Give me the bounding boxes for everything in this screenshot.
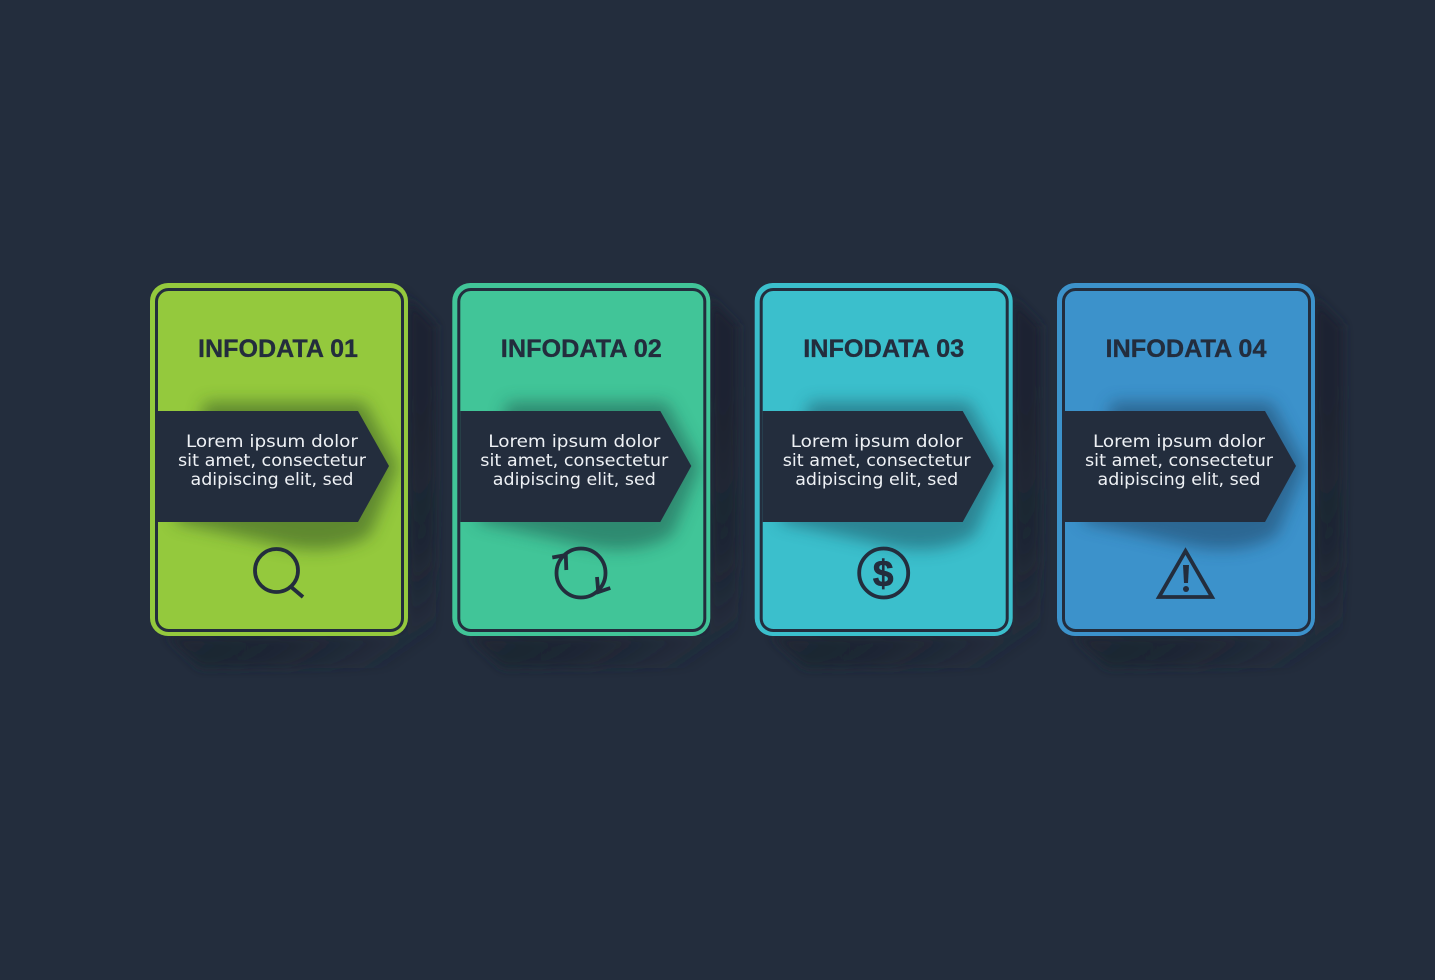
long shadow 04 bbox=[1073, 290, 1343, 668]
body text 03: Lorem ipsum dolor bbox=[791, 432, 963, 452]
arrow banner 04 bbox=[1065, 411, 1296, 522]
long shadow 03 bbox=[771, 290, 1041, 668]
inner outline 02 bbox=[459, 290, 705, 630]
body text 04: sit amet, consectetur bbox=[1085, 451, 1273, 471]
inner outline 04 bbox=[1064, 290, 1310, 630]
card body 01 bbox=[150, 283, 408, 636]
arrow banner 03 bbox=[763, 411, 994, 522]
heading 03: INFODATA 03 bbox=[803, 335, 964, 363]
body text 02: Lorem ipsum dolor bbox=[488, 432, 660, 452]
panel: card 01 bbox=[150, 283, 436, 668]
arrow banner 02 bbox=[460, 411, 691, 522]
icon: refresh cycle bbox=[552, 548, 610, 598]
long shadow 01 bbox=[166, 290, 436, 668]
body text 02: sit amet, consectetur bbox=[480, 451, 668, 471]
arrow shadow 04 bbox=[1082, 402, 1305, 549]
arrow shadow 02 bbox=[477, 402, 700, 549]
arrow shadow 01 bbox=[175, 402, 398, 549]
body text 04: Lorem ipsum dolor bbox=[1093, 432, 1265, 452]
arrow shadow 03 bbox=[780, 402, 1003, 549]
body text 02: adipiscing elit, sed bbox=[493, 470, 656, 490]
arrow banner 01 bbox=[158, 411, 389, 522]
body text 04 bbox=[1085, 432, 1273, 490]
icon: dollar coin: $ bbox=[873, 553, 894, 594]
heading 02: INFODATA 02 bbox=[501, 335, 662, 363]
card body 03 bbox=[755, 283, 1013, 636]
heading 04: INFODATA 04 bbox=[1106, 335, 1267, 363]
card body 04 bbox=[1057, 283, 1315, 636]
body text 01: Lorem ipsum dolor bbox=[186, 432, 358, 452]
panel: card 03 bbox=[755, 283, 1041, 668]
body text 01: adipiscing elit, sed bbox=[190, 470, 354, 490]
card body 02 bbox=[452, 283, 710, 636]
panel: card 02 bbox=[452, 283, 738, 668]
panel: card 04 bbox=[1057, 283, 1343, 668]
icon: magnifier bbox=[255, 549, 303, 597]
inner outline 01 bbox=[156, 290, 402, 630]
body text 02 bbox=[480, 432, 668, 490]
heading 01: INFODATA 01 bbox=[198, 335, 358, 363]
body text 01: sit amet, consectetur bbox=[178, 451, 366, 471]
body text 01 bbox=[178, 432, 366, 490]
long shadow 02 bbox=[468, 290, 738, 668]
body text 03: sit amet, consectetur bbox=[783, 451, 971, 471]
inner outline 03 bbox=[761, 290, 1007, 630]
icon: warning triangle bbox=[1159, 551, 1212, 597]
body text 03: adipiscing elit, sed bbox=[795, 470, 958, 490]
body text 04: adipiscing elit, sed bbox=[1098, 470, 1260, 490]
icon: dollar coin bbox=[859, 548, 908, 598]
body text 03 bbox=[783, 432, 971, 490]
